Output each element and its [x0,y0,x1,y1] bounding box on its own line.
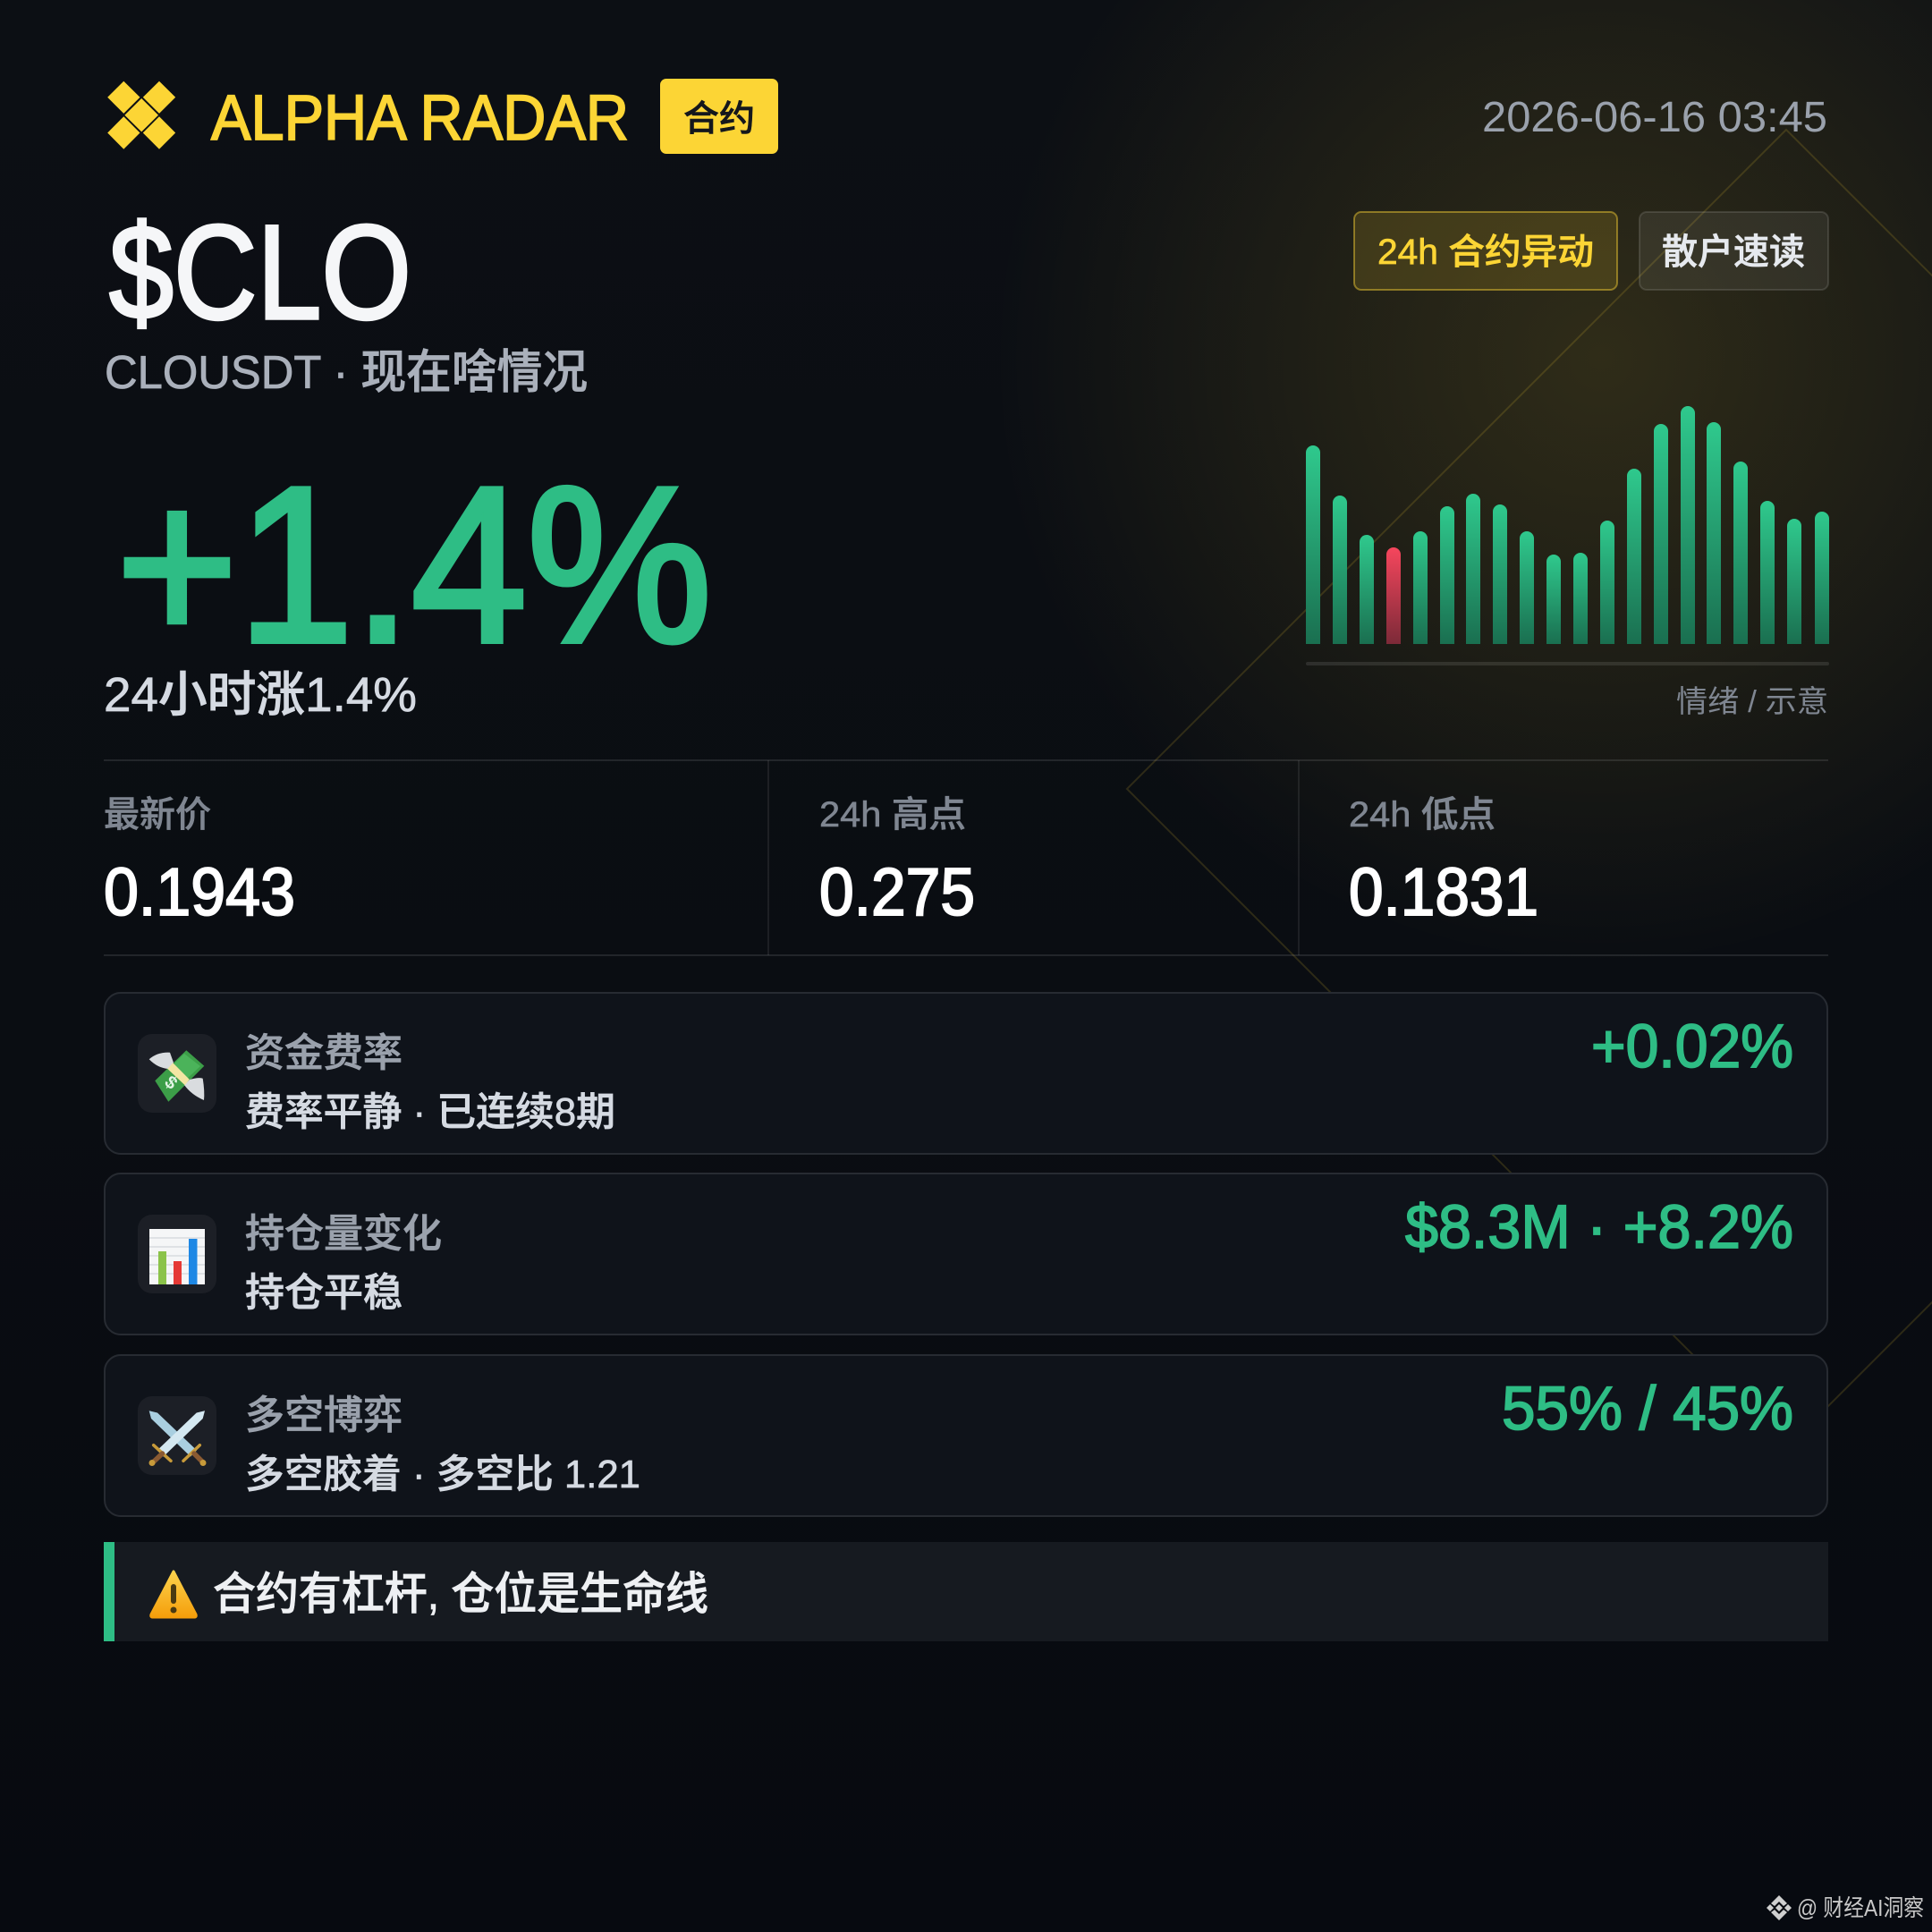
badge: contract: 合约 [683,99,755,139]
icon: warning [151,1572,196,1617]
tag: retail quick read [1640,212,1828,290]
icon: bar chart [138,1215,216,1293]
badge: contract [660,79,778,154]
stat: 24h high: 0.275 [819,854,975,929]
timestamp: 2026-06-16 03:45 [1482,94,1827,141]
icon: money with wings [138,1034,216,1113]
icon: money with wings: $ [161,1072,181,1094]
brand name: ALPHA RADAR [211,83,629,154]
tag: 24h contract movement: 24h 合约异动 [1377,233,1594,272]
stat: 24h high: 24h 高点 [819,795,966,835]
icon: logo [107,81,175,149]
icon: crossed swords [138,1396,216,1475]
stat: 24h high [819,795,975,929]
tag: retail quick read: 散户速读 [1662,233,1805,272]
change caption: 24小时涨1.4% [104,668,417,722]
stat: last price: 0.1943 [104,854,295,929]
row description: 持仓平稳 [245,1271,402,1315]
row title: 持仓量变化 [245,1212,442,1256]
stat: 24h low: 0.1831 [1349,854,1538,929]
row title: 资金费率 [245,1031,402,1075]
callout: risk warning [104,1542,1828,1641]
stats strip [104,759,1828,956]
stat: 24h low [1349,795,1538,929]
subtitle: CLOUSDT · 现在啥情况 [105,347,588,399]
panel: open interest [105,1174,1827,1335]
header: logo and brand [107,79,778,154]
big change percentage: +1.4% [116,440,712,689]
stat: 24h low: 24h 低点 [1349,795,1496,835]
row value: $8.3M · +8.2% [1405,1192,1793,1261]
row value: 55% / 45% [1502,1374,1793,1443]
panel: long short [105,1355,1827,1516]
bar chart: sentiment [1306,406,1829,665]
row description: 费率平静 · 已连续8期 [245,1090,615,1134]
row value: +0.02% [1591,1012,1793,1080]
row description: 多空胶着 · 多空比 1.21 [245,1453,640,1496]
row title: 多空博弈 [245,1394,402,1437]
stat: last price [104,795,295,929]
warning text: 合约有杠杆, 仓位是生命线 [213,1569,708,1619]
ticker title: $CLO [109,197,411,347]
icon: watermark logo [1767,1895,1792,1920]
tag: 24h contract movement [1354,212,1617,290]
panel: funding rate [105,993,1827,1154]
stat: last price: 最新价 [104,795,211,835]
chart caption: 情绪 / 示意 [1676,685,1828,719]
